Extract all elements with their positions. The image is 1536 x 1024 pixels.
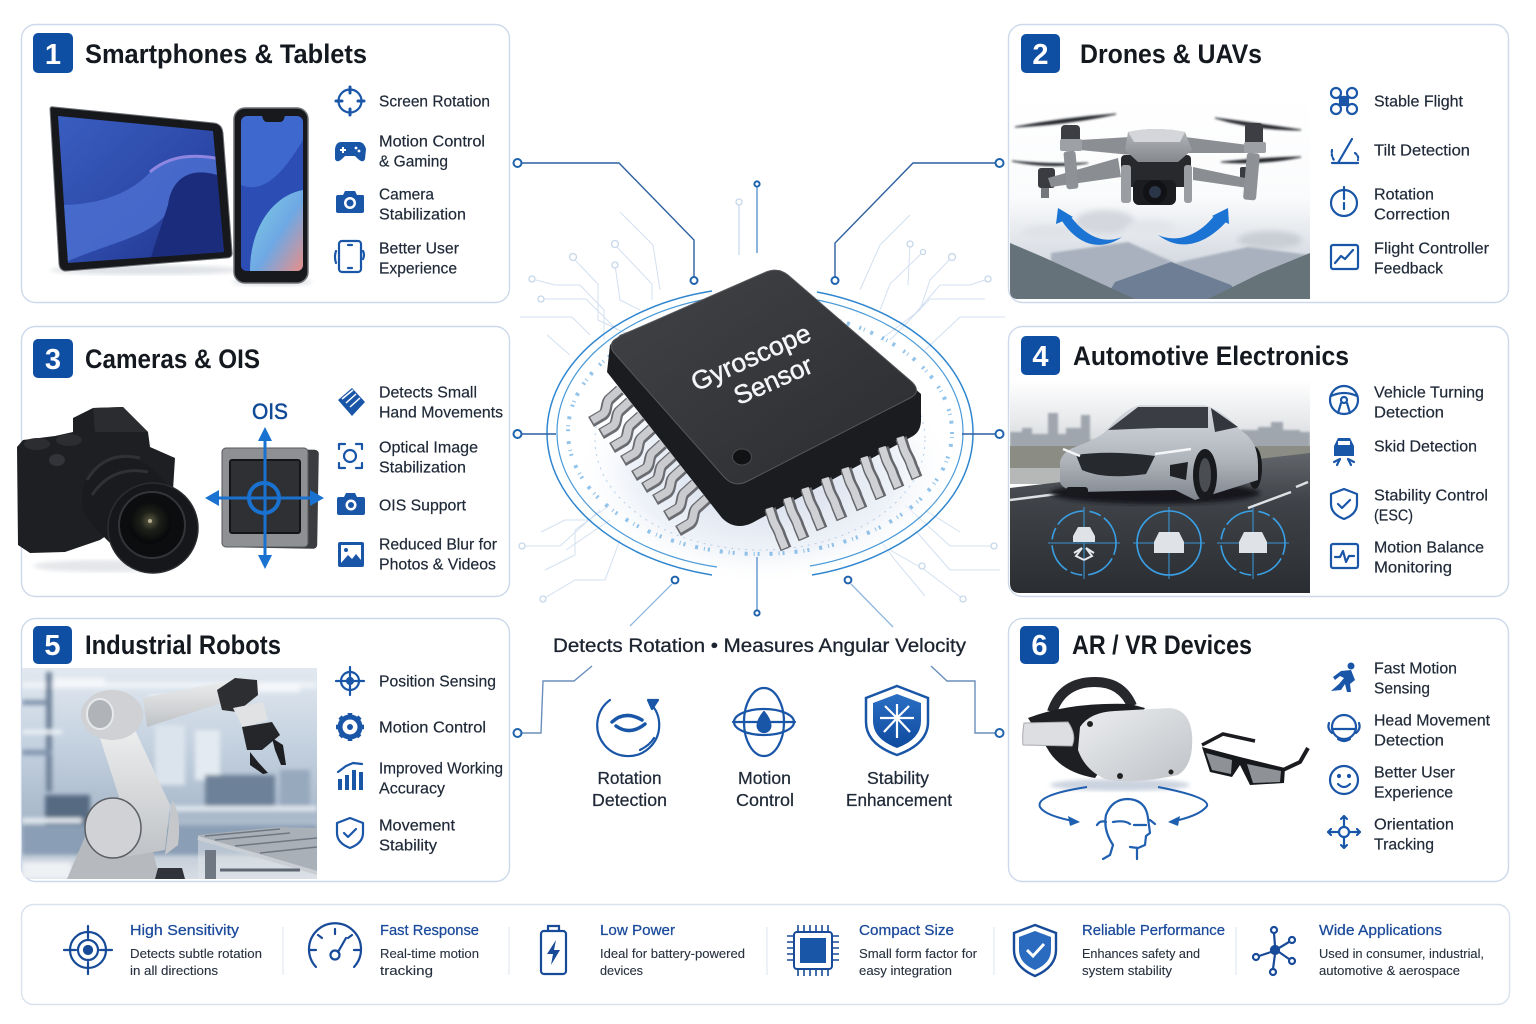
smartphone illustration	[232, 108, 312, 286]
icon: steering wheel	[1330, 386, 1358, 414]
feature list 5: Stability	[379, 838, 437, 854]
central tagline: Detects Rotation • Measures Angular Velocity	[553, 636, 967, 657]
central feature: stability enhancement	[846, 686, 952, 810]
benefit: compact size	[787, 923, 977, 978]
benefit: fast response: Fast Response	[380, 923, 479, 939]
chip label	[686, 318, 828, 424]
feature list 3: Reduced Blur for	[379, 536, 498, 554]
radial feed lines	[630, 181, 893, 627]
icon: orientation tracking	[1328, 816, 1360, 848]
heading 6: AR / VR Devices	[1072, 630, 1252, 660]
drone photo	[1010, 95, 1310, 299]
badge 5	[33, 626, 72, 664]
label: Stability	[867, 768, 929, 788]
icon: fast motion runner	[1331, 662, 1355, 692]
vehicle sensing rings	[1048, 507, 1289, 579]
icon: shield	[866, 686, 928, 755]
panel 2: drones and UAVs	[1008, 24, 1508, 302]
label	[846, 768, 952, 810]
label	[592, 768, 667, 810]
benefit: high sensitivity	[64, 923, 262, 978]
icon: motion balance monitor	[1331, 544, 1358, 568]
benefit: wide applications: Used in consumer, industrial,	[1319, 947, 1484, 961]
benefit: reliable performance: system stability	[1082, 964, 1173, 978]
icon: working accuracy chart	[338, 763, 363, 790]
icon: controller feedback chart	[1331, 245, 1358, 269]
benefit: wide applications: Wide Applications	[1319, 923, 1442, 939]
label: Motion	[738, 768, 791, 788]
panel 3: cameras and OIS	[17, 326, 510, 596]
chip label: Gyroscope	[686, 318, 815, 397]
central feature: motion control	[733, 688, 795, 810]
central feature: rotation detection	[592, 700, 667, 810]
feature list 3: Detects Small	[379, 384, 477, 402]
label: Enhancement	[846, 790, 952, 810]
feature list 3: Photos & Videos	[379, 556, 496, 574]
feature list 2	[1374, 94, 1490, 278]
feature list 6: Experience	[1374, 784, 1453, 802]
heading 5: Industrial Robots	[85, 630, 281, 660]
feature list 2: Stable Flight	[1374, 94, 1464, 110]
benefit: high sensitivity: in all directions	[130, 964, 218, 978]
feature list 1: Better User	[379, 240, 460, 258]
feature list 3	[379, 384, 503, 574]
feature list 1: Camera	[379, 186, 434, 204]
robot arm	[67, 678, 286, 879]
feature list 4: Skid Detection	[1374, 438, 1477, 456]
camera illustration	[17, 407, 198, 573]
chip label: Sensor	[729, 349, 817, 411]
feature list 4: Motion Balance	[1374, 540, 1484, 556]
benefit: reliable performance: Enhances safety and	[1082, 947, 1200, 961]
feature list 3: Stabilization	[379, 460, 466, 476]
feature list 2: Flight Controller	[1374, 240, 1490, 258]
badge 3: 3	[45, 344, 61, 376]
icon: rotation	[597, 700, 659, 756]
icon: stable flight quadcopter	[1331, 88, 1357, 114]
icon: smile	[1330, 766, 1358, 794]
head with rotation arcs	[1040, 787, 1207, 859]
benefit: reliable performance: Reliable Performance	[1082, 923, 1225, 939]
badge 1	[33, 33, 73, 73]
icon: skid detection	[1334, 438, 1354, 465]
feature list 5: Motion Control	[379, 720, 486, 736]
feature list 1	[379, 94, 490, 278]
OIS module with axis arrows	[205, 427, 324, 569]
drone body	[1012, 114, 1301, 205]
icon: camera	[336, 191, 364, 213]
benefit: low power: Low Power	[600, 923, 675, 939]
badge 3	[33, 339, 73, 378]
feature list 3: OIS Support	[379, 498, 467, 514]
feature list 1: & Gaming	[379, 154, 448, 170]
heading 3: Cameras & OIS	[85, 344, 260, 374]
feature list 5: Position Sensing	[379, 674, 496, 690]
benefit: compact size: Small form factor for	[859, 947, 977, 961]
panel 5: industrial robots	[22, 618, 510, 882]
feature list 1: Screen Rotation	[379, 94, 490, 110]
icon: hand movement	[338, 388, 365, 416]
badge 1: 1	[45, 39, 61, 71]
badge 4: 4	[1032, 341, 1049, 373]
badge 2: 2	[1032, 39, 1049, 71]
robot arm photo	[22, 668, 317, 879]
icon: OIS camera	[337, 493, 365, 515]
feature list 6: Tracking	[1374, 836, 1434, 854]
panel 1: smartphones and tablets	[22, 24, 510, 302]
gyroscope sensor chip	[591, 270, 921, 549]
car	[1050, 405, 1262, 504]
feature list 5: Accuracy	[379, 780, 445, 798]
feature list 1: Experience	[379, 260, 457, 278]
panel 4: automotive electronics	[1008, 326, 1508, 596]
benefit: reliable performance	[1014, 923, 1225, 978]
feature list 2: Feedback	[1374, 260, 1444, 278]
VR headset illustration	[1023, 682, 1192, 791]
label: Detection	[592, 790, 667, 810]
heading 4: Automotive Electronics	[1073, 341, 1349, 371]
rotation arrows	[1056, 208, 1229, 245]
feature list 4: Monitoring	[1374, 560, 1452, 576]
icon: gyro sphere	[733, 688, 795, 756]
feature list 2: Correction	[1374, 206, 1450, 224]
label: Control	[736, 790, 794, 810]
label: Rotation	[598, 768, 662, 788]
icon: stability shield	[1331, 489, 1357, 519]
feature list 5	[379, 674, 503, 854]
feature list 6: Orientation	[1374, 816, 1454, 834]
icon: optical image stabilization	[339, 444, 362, 468]
feature list 6	[1374, 660, 1491, 854]
benefit: fast response: tracking	[380, 964, 433, 978]
panel 6: AR and VR devices	[1008, 618, 1508, 882]
benefit: low power	[541, 923, 745, 978]
feature list 6: Sensing	[1374, 680, 1430, 698]
icon: movement stability shield	[337, 818, 363, 848]
feature list 2: Rotation	[1374, 186, 1434, 204]
badge 6: 6	[1031, 630, 1048, 662]
benefit: high sensitivity: Detects subtle rotation	[130, 947, 262, 961]
bottom benefits bar	[22, 904, 1510, 1004]
car photo	[1010, 380, 1310, 593]
benefit: low power: devices	[600, 964, 643, 978]
icon: screen rotation	[336, 87, 364, 115]
feature list 2: Tilt Detection	[1374, 142, 1470, 160]
AR glasses illustration	[1202, 734, 1308, 785]
feature list 6: Head Movement	[1374, 712, 1491, 730]
feature list 1: Stabilization	[379, 206, 466, 224]
background circuit traces	[519, 212, 1005, 602]
feature list 4: (ESC)	[1374, 508, 1413, 524]
icon: tilt detection	[1332, 139, 1358, 163]
benefit: compact size: Compact Size	[859, 923, 954, 939]
benefit: fast response	[309, 923, 479, 978]
central gyroscope hub with circuit traces	[514, 159, 1005, 737]
feature list 3: Optical Image	[379, 440, 478, 456]
badge 6	[1020, 626, 1059, 664]
feature list 4: Stability Control	[1374, 488, 1488, 504]
heading 1: Smartphones & Tablets	[85, 39, 367, 69]
benefit: high sensitivity: High Sensitivity	[130, 923, 240, 939]
icon: gamepad	[335, 142, 366, 161]
feature list 5: Movement	[379, 818, 456, 834]
glow under chip	[575, 355, 955, 585]
icon: motion gear	[336, 713, 364, 741]
icon: position sensing	[336, 667, 364, 695]
feature list 6: Detection	[1374, 732, 1444, 750]
feature list 6: Fast Motion	[1374, 660, 1457, 678]
feature list 1: Motion Control	[379, 134, 485, 150]
badge 4	[1021, 336, 1060, 375]
feature list 4	[1374, 384, 1488, 576]
benefit: fast response: Real-time motion	[380, 947, 479, 961]
icon: better experience device	[335, 241, 364, 272]
orbit rings	[547, 291, 973, 575]
icon: rotation correction	[1331, 187, 1357, 216]
feature list 6: Better User	[1374, 764, 1456, 782]
benefit: wide applications	[1253, 923, 1484, 978]
feature list 4: Detection	[1374, 404, 1444, 422]
badge 2	[1021, 34, 1060, 73]
icon: photos	[338, 542, 364, 567]
benefit: low power: Ideal for battery-powered	[600, 947, 745, 961]
connector lines to application panels	[514, 159, 1004, 737]
benefit: wide applications: automotive & aerospace	[1319, 964, 1460, 978]
feature list 5: Improved Working	[379, 760, 503, 778]
benefit: compact size: easy integration	[859, 964, 952, 978]
label	[736, 768, 794, 810]
badge 5: 5	[44, 630, 61, 662]
tablet illustration	[50, 107, 240, 275]
feature list 3: Hand Movements	[379, 404, 503, 422]
icon: head movement	[1328, 715, 1360, 741]
work table	[198, 827, 317, 879]
OIS label: OIS	[252, 399, 288, 424]
feature list 4: Vehicle Turning	[1374, 384, 1484, 402]
heading 2: Drones & UAVs	[1080, 39, 1262, 69]
